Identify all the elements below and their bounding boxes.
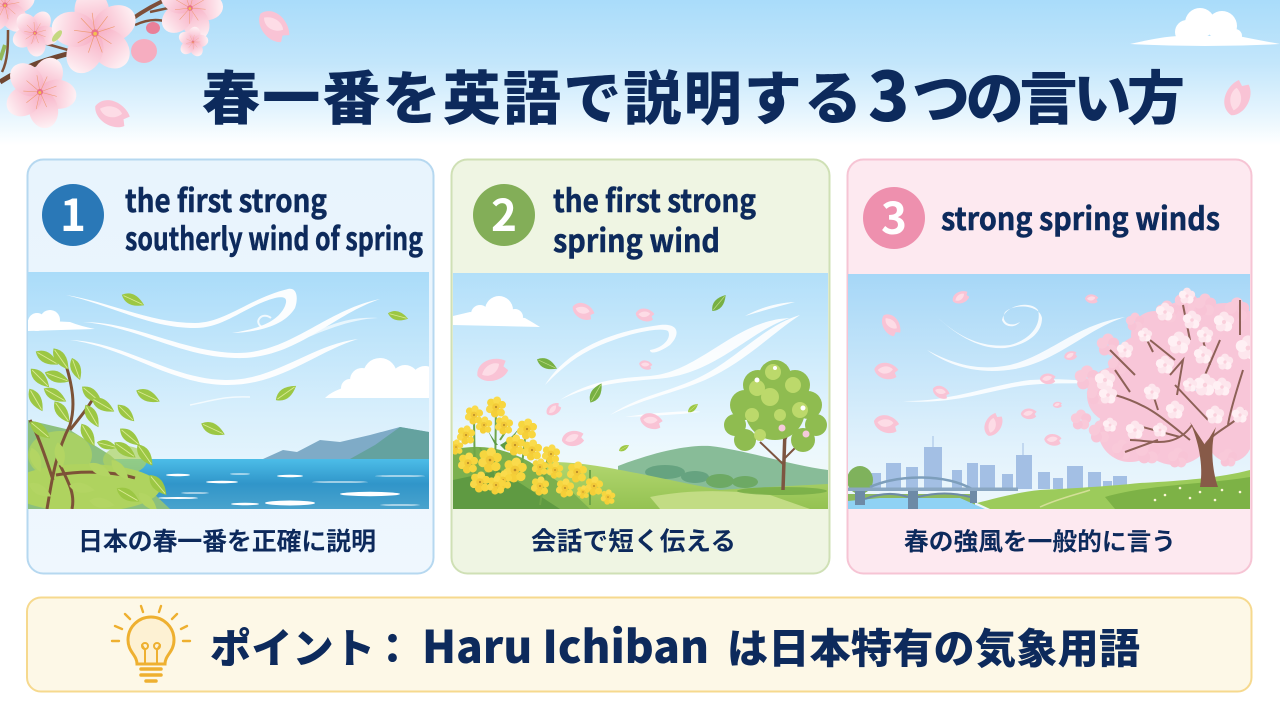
meadow [532, 462, 828, 509]
hill [618, 446, 828, 490]
illustration: city and cherry tree [847, 274, 1270, 509]
foliage mass [28, 431, 159, 509]
bridge [848, 477, 1018, 509]
badge 3 [863, 183, 925, 249]
phrase 1: southerly wind of spring [125, 214, 423, 259]
point text: Haru Ichiban [422, 611, 709, 676]
badge 2: 2 [491, 180, 517, 244]
cherry tree [1071, 288, 1270, 487]
cherry blossom branch [0, 0, 233, 143]
phrase 2: spring wind [553, 216, 720, 261]
point text: ： [372, 615, 413, 675]
point text: ポイント [210, 615, 375, 675]
title: 3 [868, 42, 909, 141]
falling petal top [253, 4, 294, 47]
panel: card 3 [847, 160, 1270, 574]
title: 春一番を英語で説明する [202, 52, 862, 136]
flying petals and leaves [474, 292, 729, 453]
icon: light bulb [112, 606, 190, 681]
cloud [453, 296, 540, 327]
caption 1: 日本の春一番を正確に説明 [78, 522, 376, 558]
waves [158, 473, 425, 506]
badge 1: 1 [60, 180, 86, 244]
trees by bridge [847, 466, 873, 494]
grass bank [977, 470, 1250, 509]
bushes [645, 465, 758, 488]
cloud top right [1130, 8, 1280, 46]
badge 3: 3 [881, 183, 907, 247]
panel: point banner [27, 598, 1252, 692]
sea [114, 459, 429, 509]
panel: card 2 [449, 160, 830, 574]
phrase 2: the first strong [553, 176, 756, 221]
mountains [263, 427, 429, 459]
river [848, 498, 985, 509]
skyline [871, 436, 1127, 489]
badge 2 [473, 180, 535, 246]
badge 1 [42, 180, 104, 246]
wind lines [66, 289, 380, 385]
wind lines [545, 302, 800, 417]
illustration: windy sea [10, 272, 439, 515]
clouds [28, 310, 439, 398]
falling petal left [90, 94, 133, 132]
caption 2: 会話で短く伝える [531, 521, 736, 558]
tree [724, 360, 827, 495]
falling petal right [1219, 78, 1255, 119]
point text: は日本特有の気象用語 [727, 615, 1140, 675]
illustration: meadow [449, 273, 828, 509]
title: つの言い方 [912, 52, 1185, 136]
hill behind tree [28, 420, 170, 509]
rapeseed flowers [449, 396, 615, 509]
phrase 3: strong spring winds [941, 194, 1220, 239]
panel: card 1 [10, 160, 439, 574]
falling petals [872, 289, 1099, 447]
caption 3: 春の強風を一般的に言う [904, 522, 1176, 558]
wind lines [903, 305, 1125, 402]
tree [28, 348, 166, 509]
blowing leaves [114, 290, 409, 439]
sky background [0, 0, 1280, 158]
phrase 1: the first strong [125, 176, 327, 221]
